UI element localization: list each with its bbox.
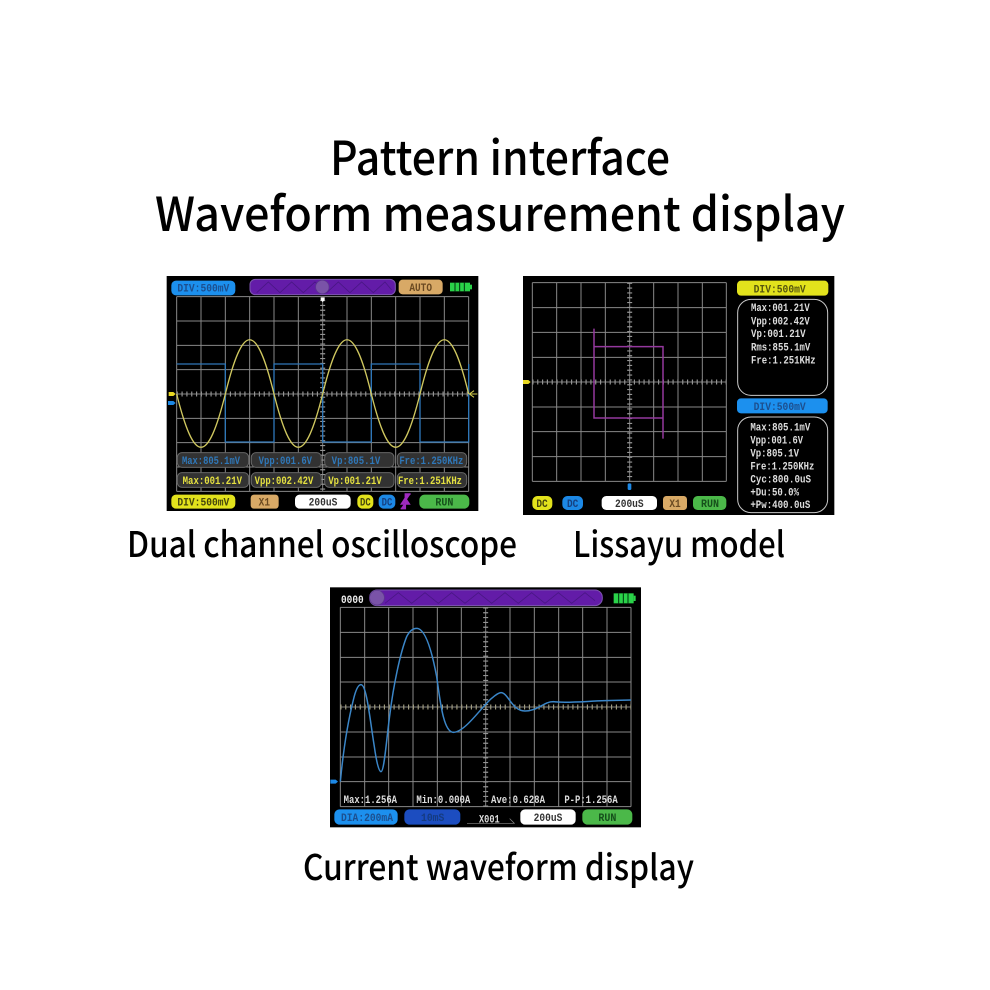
icon: battery	[450, 283, 472, 291]
measurements: P-P:1.256A	[564, 795, 618, 807]
XY trace	[594, 329, 663, 439]
centre axes	[177, 300, 469, 491]
channel 1 readout	[738, 299, 828, 395]
caption: current waveform display: Current waveform display	[303, 840, 694, 891]
bottom bar: RUN	[419, 495, 469, 510]
bottom bar: X1: X1	[259, 498, 270, 510]
channel 2 readout: Fre:1.250KHz	[750, 461, 814, 473]
channel 1 scale	[737, 281, 828, 296]
channel 1 measurements: Max:001.21V	[183, 476, 242, 488]
icon: battery	[614, 593, 636, 603]
top bar: channel 2 scale: DIV:500mV	[177, 284, 229, 296]
measurements: Min:0.000A	[416, 795, 470, 807]
bottom bar: timebase: 200uS	[309, 498, 337, 510]
bottom bar: zoom: X001	[479, 814, 500, 826]
channel 1 measurements: Fre:1.251KHz	[398, 476, 462, 488]
channel markers	[168, 297, 477, 405]
bottom bar: X1	[663, 496, 687, 511]
top bar: channel 2 scale	[171, 281, 235, 296]
bottom bar: coupling DC: DC	[382, 498, 392, 510]
bottom bar: X1: X1	[669, 499, 681, 511]
measurements	[344, 795, 618, 807]
title: Pattern interface	[330, 120, 670, 189]
channel 2 measurements: Vpp:001.6V	[259, 456, 312, 468]
bottom bar: coupling DC	[532, 496, 583, 511]
channel 1 readout: Fre:1.251KHz	[751, 355, 816, 367]
title	[155, 120, 845, 245]
bottom bar: channel 1 scale	[171, 495, 235, 510]
bottom bar: timebase	[602, 496, 657, 511]
bottom bar: time setting: 10mS	[421, 813, 444, 825]
bottom bar: coupling DC: DC	[567, 499, 578, 511]
caption: Lissayu model: Lissayu model	[573, 517, 785, 568]
bottom bar: timebase	[520, 809, 576, 825]
title: Waveform measurement display	[155, 176, 845, 245]
channel marker	[330, 780, 338, 784]
channel 2 scale: DIV:500mV	[754, 402, 806, 414]
channel 1 scale: DIV:500mV	[754, 284, 806, 296]
channel 2 scale	[737, 398, 828, 414]
top bar: position slider	[250, 279, 395, 295]
channel 2 measurements: Max:805.1mV	[182, 456, 240, 468]
bottom bar: coupling DC	[357, 495, 395, 510]
channel 2 square wave	[177, 364, 469, 442]
bottom bar: time setting	[404, 809, 460, 825]
grid	[532, 283, 726, 481]
channel 2 measurements	[177, 453, 467, 468]
channel 2 readout	[738, 417, 828, 513]
bottom bar: scale: DIA:200mA	[341, 813, 393, 825]
bottom bar: coupling DC: DC	[360, 498, 371, 510]
top bar: AUTO button: AUTO	[409, 283, 432, 295]
channel 2 readout: Cyc:800.0uS	[750, 474, 811, 486]
bottom bar: timebase: 200uS	[615, 499, 644, 511]
grid	[177, 297, 469, 491]
bottom bar: scale	[334, 809, 398, 825]
channel 1 measurements	[177, 473, 467, 488]
centre axes	[340, 607, 631, 807]
bottom bar: timebase: 200uS	[534, 813, 562, 825]
channel 1 sine wave	[177, 340, 469, 447]
grid	[340, 607, 631, 807]
counter: 0000	[341, 595, 364, 607]
bottom bar: RUN	[693, 496, 726, 511]
channel 2 readout: +Pw:400.0uS	[750, 500, 810, 512]
channel markers	[523, 380, 631, 490]
channel 1 measurements: Vpp:002.42V	[255, 476, 313, 488]
panel: dual channel oscilloscope screen	[167, 276, 478, 511]
channel 2 readout: Vp:805.1V	[750, 448, 799, 460]
channel 2 readout: Vpp:001.6V	[750, 436, 803, 448]
bottom bar: timebase	[295, 495, 351, 510]
bottom bar: RUN: RUN	[435, 498, 453, 510]
channel 1 readout: Max:001.21V	[751, 303, 810, 315]
panel: Lissajous model screen	[523, 276, 834, 515]
channel 1 readout: Vp:001.21V	[751, 329, 806, 341]
bottom bar: RUN	[582, 809, 632, 825]
measurements: Ave:0.628A	[491, 795, 545, 807]
channel 2 measurements: Vp:805.1V	[332, 456, 380, 468]
icon: trigger edge	[401, 494, 411, 509]
bottom bar: coupling DC: DC	[536, 499, 548, 511]
channel 1 readout: Vpp:002.42V	[751, 316, 810, 328]
measurements: Max:1.256A	[344, 795, 397, 807]
current trace	[340, 628, 631, 782]
position slider	[370, 590, 602, 606]
centre axes	[532, 283, 726, 481]
panel: current waveform screen	[330, 587, 641, 827]
channel 1 measurements: Vp:001.21V	[328, 476, 382, 488]
bottom bar: RUN: RUN	[598, 813, 616, 825]
bottom bar: RUN: RUN	[701, 499, 719, 511]
caption: dual channel oscilloscope: Dual channel oscilloscope	[127, 517, 517, 568]
top bar: AUTO button	[399, 280, 443, 295]
bottom bar: X1	[251, 495, 279, 510]
bottom bar: channel 1 scale: DIV:500mV	[177, 498, 229, 510]
bottom bar: zoom	[467, 814, 514, 826]
channel 2 readout: +Du:50.0%	[750, 487, 799, 499]
channel 2 measurements: Fre:1.250KHz	[399, 456, 463, 468]
channel 1 readout: Rms:855.1mV	[751, 342, 810, 354]
channel 2 readout: Max:805.1mV	[750, 423, 810, 435]
